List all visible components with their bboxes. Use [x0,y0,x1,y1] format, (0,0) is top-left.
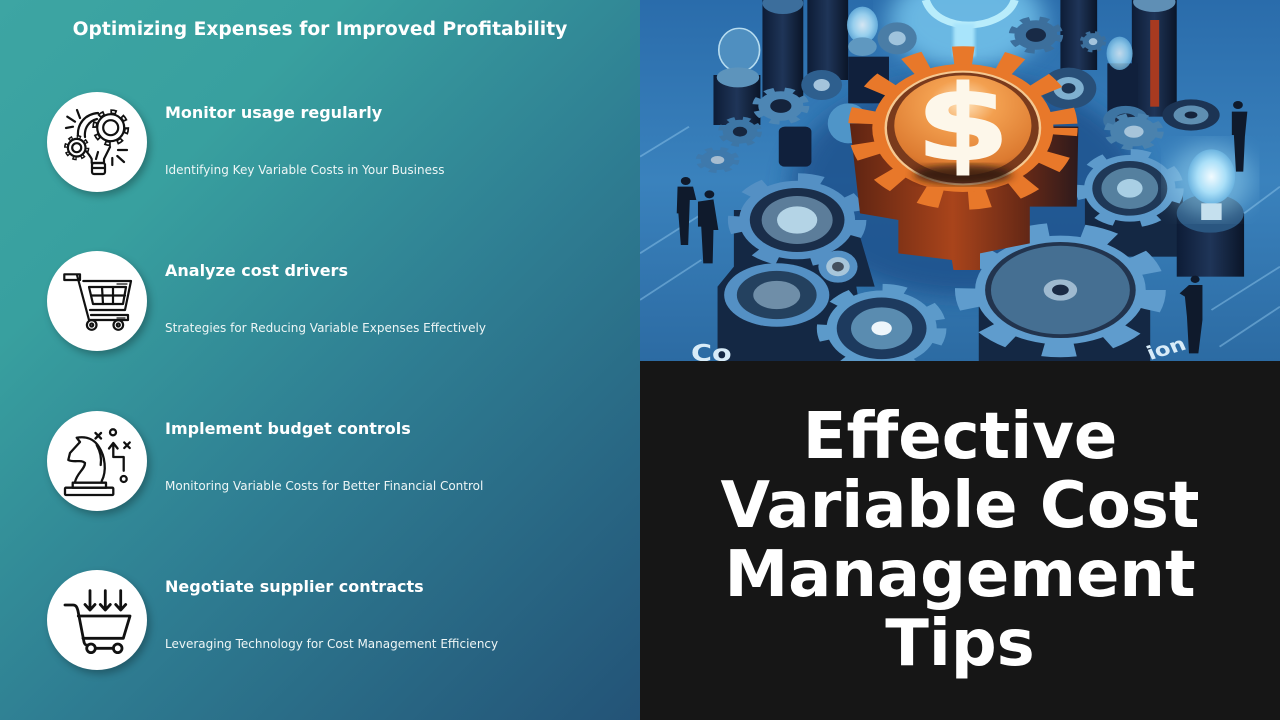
heading: Analyze cost drivers [165,261,348,280]
top glow [889,0,1044,70]
orange gear with dollar sign [850,55,1078,270]
main title: Management [724,538,1196,612]
light blue gears lower left [718,179,939,368]
icon: lightbulb with gears [47,92,147,192]
main title: Variable Cost [721,469,1199,543]
main title: Effective [803,400,1117,474]
main title [720,400,1199,681]
description: Strategies for Reducing Variable Expenses Effectively [165,321,486,335]
light blue gears right [970,154,1183,361]
background [640,0,1280,361]
people silhouettes [677,101,1247,353]
icon: shopping cart [47,251,147,351]
panel: tips list [0,0,640,720]
icon: cart with down arrows [47,570,147,670]
partial lettering at the bottom [691,333,1189,367]
heading: Implement budget controls [165,419,411,438]
description: Monitoring Variable Costs for Better Financial Control [165,479,483,493]
bright ring and beam [926,0,1015,57]
tip 4: negotiate supplier contracts [47,570,498,677]
small dark gears upper [700,19,1220,171]
tip 3: implement budget controls [47,411,483,518]
tip 2: analyze cost drivers [46,251,486,358]
right cylinder and glowing bulb [1169,143,1251,277]
orange gear with dollar sign: $ [916,64,1010,184]
floor shadows [791,77,1142,297]
description: Leveraging Technology for Cost Management Efficiency [165,637,498,651]
description: Identifying Key Variable Costs in Your Business [165,163,444,177]
main title: Tips [885,607,1035,681]
illustration: gears and dollar sign [640,0,1280,361]
tip 1: monitor usage [46,92,444,200]
dark cylinders [713,0,1177,167]
circuit lines [640,127,1280,347]
panel: title block [640,361,1280,720]
heading: Negotiate supplier contracts [165,577,424,596]
icon: chess knight strategy [47,411,147,511]
subtitle heading: Optimizing Expenses for Improved Profitability [73,19,567,40]
heading: Monitor usage regularly [165,103,382,122]
bulbs [717,7,1133,87]
